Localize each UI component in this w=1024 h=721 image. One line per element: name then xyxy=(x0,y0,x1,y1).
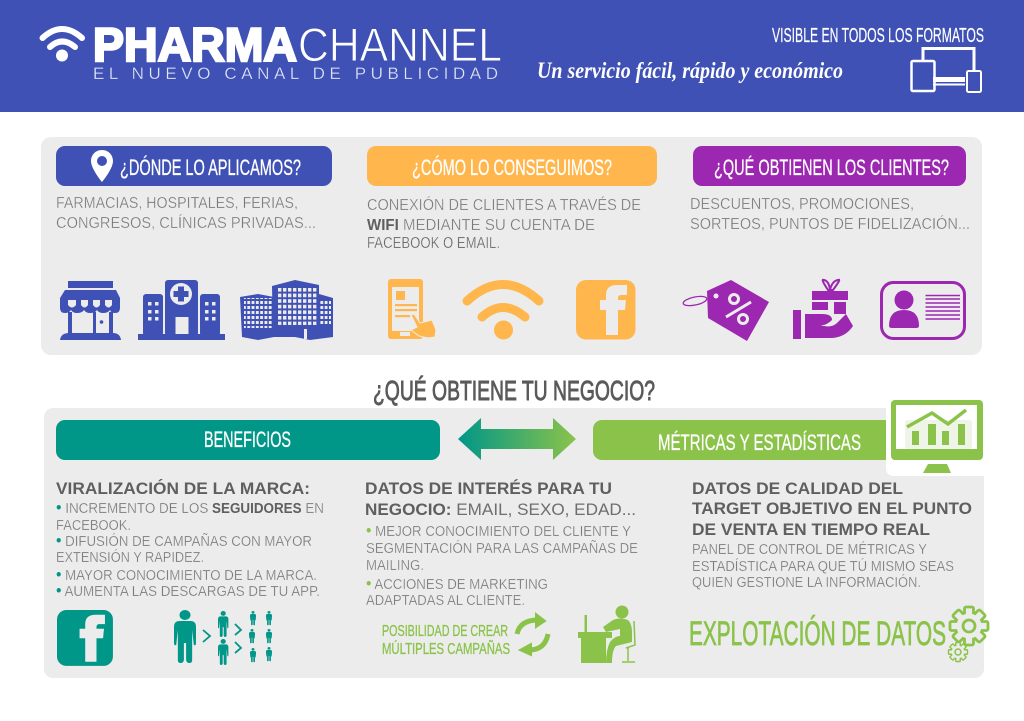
heading pill: metricas: MÉTRICAS Y ESTADÍSTICAS xyxy=(658,430,861,455)
heading pill: donde: ¿DÓNDE LO APLICAMOS? xyxy=(120,155,301,180)
icon: id card xyxy=(882,282,964,338)
column: como lo conseguimos xyxy=(367,146,657,340)
column: datos de interes text: SEGMENTACIÓN PARA LAS CAMPAÑAS DE xyxy=(366,540,638,557)
heading pill: beneficios xyxy=(56,420,440,460)
column: datos de interes text: ADAPTADAS AL CLIENTE. xyxy=(366,593,525,609)
icon: discount tag xyxy=(682,280,769,341)
column: datos de calidad text: PANEL DE CONTROL DE MÉTRICAS Y xyxy=(692,541,927,558)
header band xyxy=(0,0,1024,112)
column: viralizacion text: EXTENSIÓN Y RAPIDEZ. xyxy=(56,549,204,566)
column: datos de interes text xyxy=(365,479,638,609)
text: clientes: DESCUENTOS, PROMOCIONES, xyxy=(690,196,914,213)
text: clientes xyxy=(690,196,970,233)
heading pill: como: ¿CÓMO LO CONSEGUIMOS? xyxy=(412,155,612,180)
section title: ¿QUÉ OBTIENE TU NEGOCIO? xyxy=(373,375,655,406)
text: como: WIFI MEDIANTE SU CUENTA DE xyxy=(367,217,595,234)
subtitle: EL NUEVO CANAL DE PUBLICIDAD xyxy=(93,64,498,83)
callout: campaigns: POSIBILIDAD DE CREAR xyxy=(382,623,508,640)
column: datos de calidad text: ESTADÍSTICA PARA QUE TÚ MISMO SEAS xyxy=(692,558,954,575)
icon: monitor chart xyxy=(886,400,984,476)
column: datos de calidad text xyxy=(692,479,972,591)
icon: desk worker xyxy=(578,606,635,663)
text: donde: FARMACIAS, HOSPITALES, FERIAS, xyxy=(56,195,298,212)
icon: hospital xyxy=(138,280,225,340)
icon: devices xyxy=(912,48,981,92)
callout: campaigns: MÚLTIPLES CAMPAÑAS xyxy=(382,641,510,658)
column: datos de calidad text: DATOS DE CALIDAD DEL xyxy=(692,479,903,498)
callout: campaigns xyxy=(382,623,510,658)
brand name: CHANNEL xyxy=(298,18,502,71)
panel: bottom xyxy=(44,400,988,678)
column: viralizacion text xyxy=(56,479,324,600)
column: datos de calidad text: QUIEN GESTIONE LA INFORMACIÓN. xyxy=(692,574,921,591)
icon: wifi xyxy=(467,284,539,340)
column: datos de interes text: DATOS DE INTERÉS PARA TU xyxy=(365,479,612,498)
column: donde lo aplicamos xyxy=(56,146,333,340)
column: viralizacion text: • MAYOR CONOCIMIENTO DE LA MARCA. xyxy=(56,565,317,584)
tagline: Un servicio fácil, rápido y económico xyxy=(537,58,843,83)
text: como: FACEBOOK O EMAIL. xyxy=(367,235,500,252)
icon: facebook teal xyxy=(57,610,113,666)
column: viralizacion text: • AUMENTA LAS DESCARGAS DE TU APP. xyxy=(56,581,320,600)
icon: refresh xyxy=(517,614,548,655)
text: donde xyxy=(56,195,316,232)
heading pill: clientes xyxy=(693,146,966,186)
text: clientes: SORTEOS, PUNTOS DE FIDELIZACIÓN... xyxy=(690,216,970,233)
column: datos de calidad text: DE VENTA EN TIEMPO REAL xyxy=(692,520,930,539)
column: que obtienen los clientes xyxy=(682,146,970,341)
panel: top xyxy=(41,137,982,355)
arrow: double xyxy=(458,418,576,460)
icon: gears xyxy=(948,607,988,662)
column: datos de interes text: NEGOCIO: EMAIL, SEXO, EDAD... xyxy=(365,500,636,519)
icon: wifi logo xyxy=(42,29,82,62)
icon: facebook xyxy=(576,280,636,340)
icon: phone touch xyxy=(388,279,436,339)
text: donde: CONGRESOS, CLÍNICAS PRIVADAS... xyxy=(56,215,316,232)
icon: office buildings xyxy=(240,280,333,340)
column: datos de interes text: • ACCIONES DE MARKETING xyxy=(366,574,548,593)
brand name xyxy=(93,18,502,71)
text: como xyxy=(367,197,641,252)
icon: people network xyxy=(174,610,272,665)
heading pill: como xyxy=(367,146,657,186)
icon: store xyxy=(60,281,121,340)
column: viralizacion text: FACEBOOK. xyxy=(56,518,131,534)
column: viralizacion text: • DIFUSIÓN DE CAMPAÑAS CON MAYOR xyxy=(56,531,312,550)
brand name: PHARMA xyxy=(93,18,297,71)
icon: gift in hand xyxy=(793,280,853,339)
heading pill: beneficios: BENEFICIOS xyxy=(204,427,291,452)
column: viralizacion text: • INCREMENTO DE LOS SEGUIDORES EN xyxy=(56,498,324,517)
column: datos de interes text: MAILING. xyxy=(366,558,424,574)
column: viralizacion text: VIRALIZACIÓN DE LA MARCA: xyxy=(56,479,310,498)
column: datos de interes text: • MEJOR CONOCIMIENTO DEL CLIENTE Y xyxy=(366,521,631,540)
column: datos de calidad text: TARGET OBJETIVO EN EL PUNTO xyxy=(692,499,972,518)
heading pill: metricas xyxy=(593,420,903,460)
text: como: CONEXIÓN DE CLIENTES A TRAVÉS DE xyxy=(367,197,641,214)
heading pill: donde xyxy=(56,146,332,186)
